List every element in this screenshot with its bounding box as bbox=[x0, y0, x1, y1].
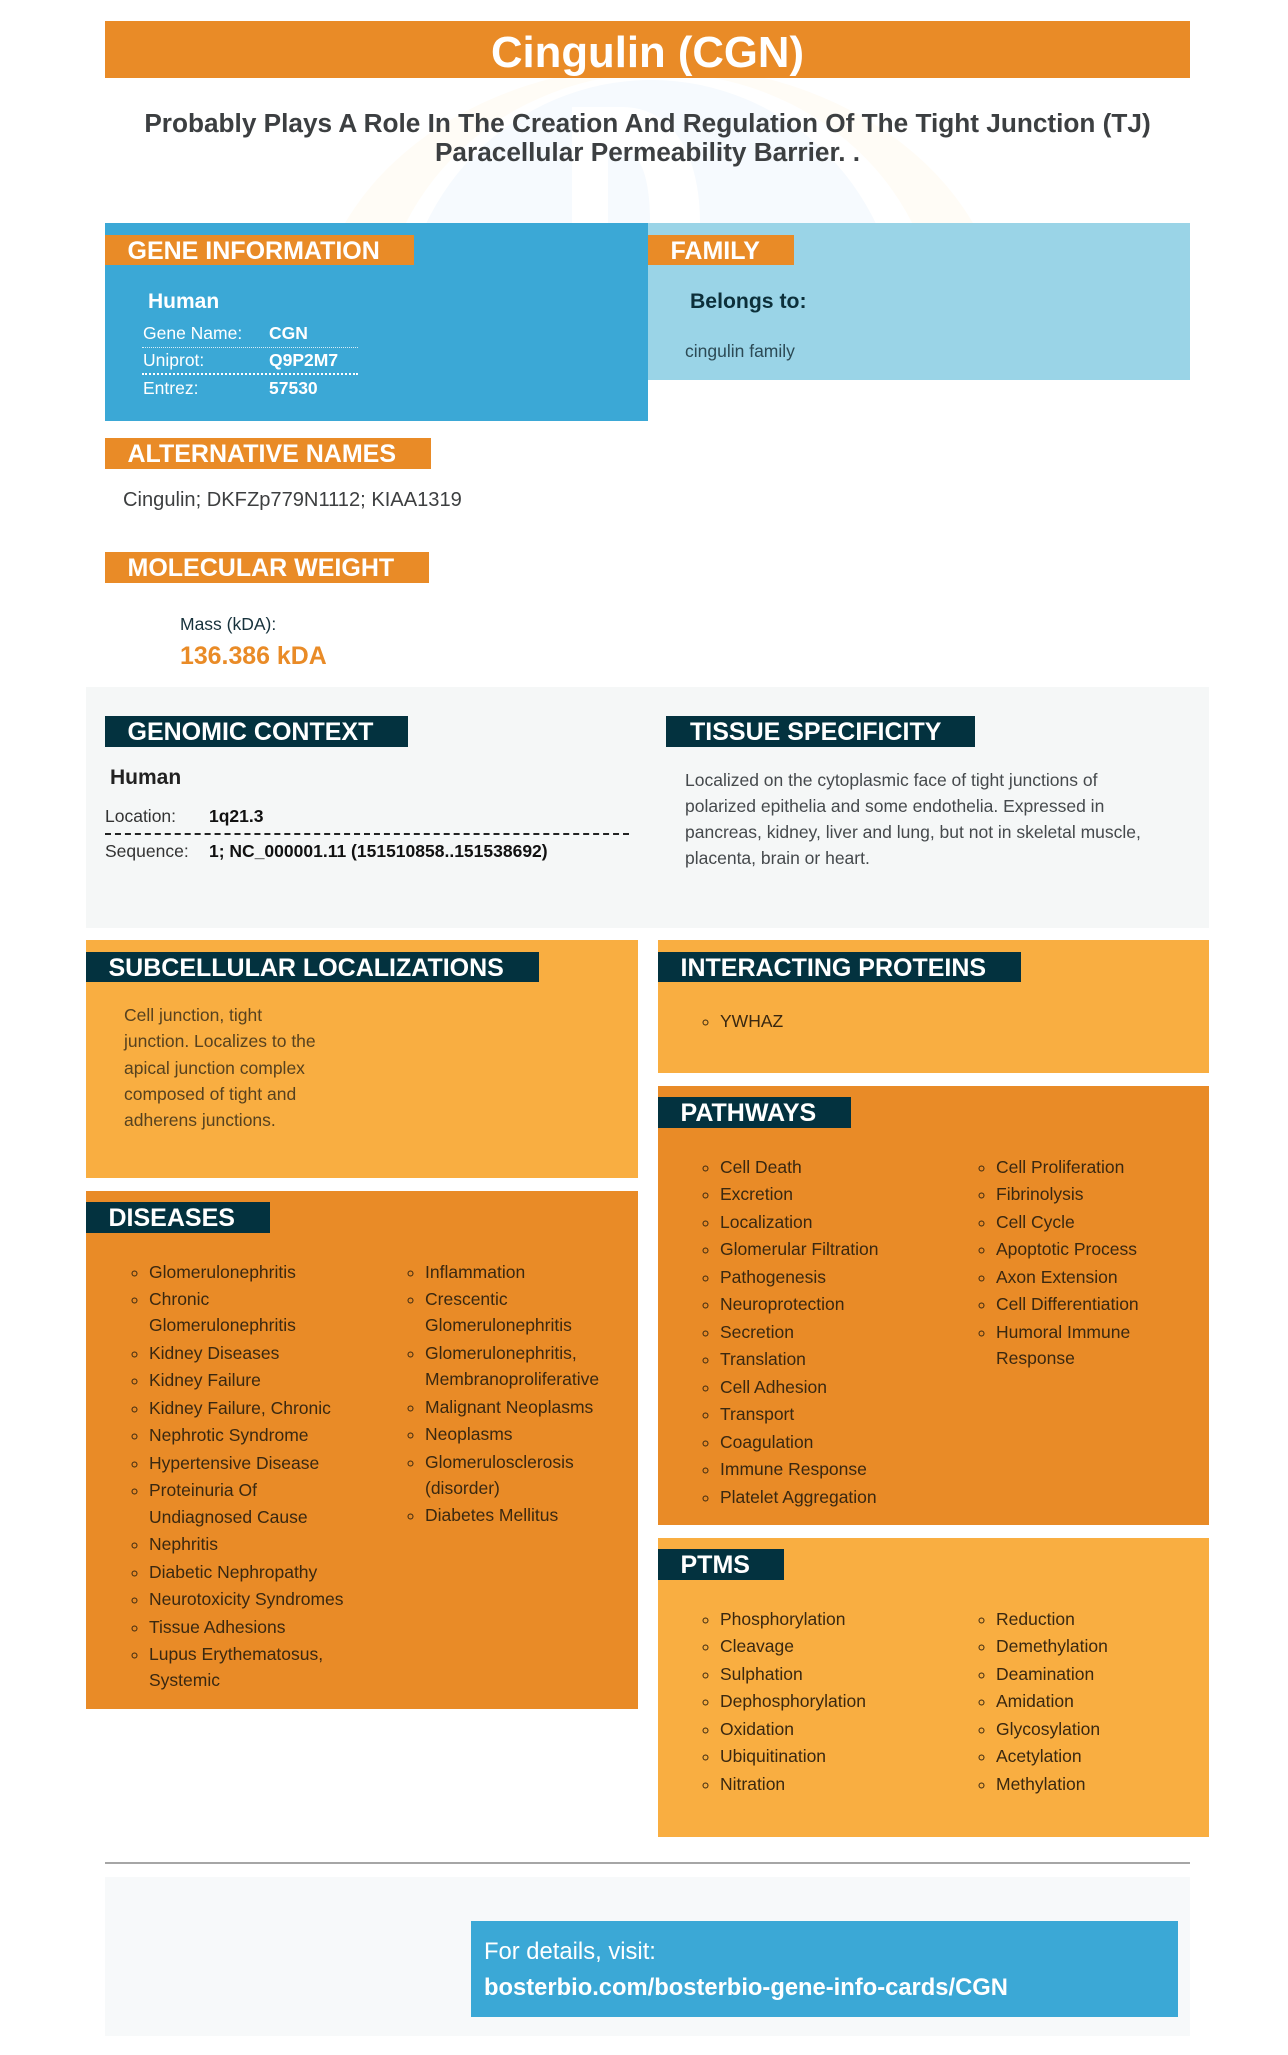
title: Cingulin (CGN) bbox=[491, 28, 804, 77]
uniprot row bbox=[142, 347, 358, 375]
disease list: column 1: Chronic bbox=[149, 1289, 209, 1309]
pathways list: column 2: Cell Cycle bbox=[996, 1212, 1075, 1232]
location row: Location: bbox=[105, 806, 176, 826]
subcellular text: composed of tight and bbox=[124, 1084, 296, 1104]
location row bbox=[105, 803, 629, 835]
disease list: column 1: Glomerulonephritis bbox=[149, 1315, 296, 1335]
ptms list: column 1: Phosphorylation bbox=[720, 1609, 846, 1629]
disease list: column 2: Malignant Neoplasms bbox=[425, 1397, 593, 1417]
pathways list: column 1: Cell Death bbox=[720, 1157, 802, 1177]
disease list: column 2: Glomerulosclerosis bbox=[425, 1452, 574, 1472]
uniprot row: Q9P2M7 bbox=[269, 350, 338, 370]
disease list: column 1: Nephrotic Syndrome bbox=[149, 1425, 309, 1445]
heading: family: FAMILY bbox=[670, 237, 760, 265]
location row: 1q21.3 bbox=[209, 806, 263, 826]
disease list: column 1: Proteinuria Of bbox=[149, 1480, 257, 1500]
pathways list: column 1: Platelet Aggregation bbox=[720, 1487, 877, 1507]
tissue specificity text: placenta, brain or heart. bbox=[685, 848, 870, 868]
entrez row: Entrez: bbox=[143, 378, 198, 398]
heading: diseases bbox=[86, 1202, 270, 1233]
disease list: column 1: Glomerulonephritis bbox=[149, 1262, 296, 1282]
pathways list: column 2: Axon Extension bbox=[996, 1267, 1118, 1287]
disease list: column 1: Kidney Failure bbox=[149, 1370, 261, 1390]
ptms list: column 2: Amidation bbox=[996, 1691, 1074, 1711]
heading: pathways: PATHWAYS bbox=[680, 1099, 816, 1127]
title bbox=[105, 21, 1190, 78]
gene name row: CGN bbox=[269, 323, 308, 343]
disease list: column 1: Kidney Diseases bbox=[149, 1343, 279, 1363]
pathways list: column 1: Pathogenesis bbox=[720, 1267, 826, 1287]
disease list: column 1 bbox=[132, 1262, 344, 1690]
gene name row: Gene Name: bbox=[143, 323, 242, 343]
subtitle bbox=[144, 108, 1151, 167]
heading: ptms: PTMS bbox=[680, 1551, 750, 1579]
heading: diseases: DISEASES bbox=[108, 1204, 235, 1232]
panel: genomic context and tissue specificity bbox=[86, 687, 1209, 928]
pathways list: column 1: Coagulation bbox=[720, 1432, 813, 1452]
pathways list: column 2: Cell Differentiation bbox=[996, 1294, 1139, 1314]
subcellular text: adherens junctions. bbox=[124, 1110, 276, 1130]
disease list: column 1: Systemic bbox=[149, 1670, 220, 1690]
ptms list: column 1: Oxidation bbox=[720, 1719, 794, 1739]
interacting proteins list: YWHAZ bbox=[720, 1011, 783, 1031]
pathways list: column 1: Translation bbox=[720, 1349, 806, 1369]
pathways list: column 1 bbox=[702, 1157, 879, 1507]
pathways list: column 1: Glomerular Filtration bbox=[720, 1239, 879, 1259]
disease list: column 2: Inflammation bbox=[425, 1262, 525, 1282]
disease list: column 2: Neoplasms bbox=[425, 1424, 513, 1444]
panel: footer bbox=[105, 1877, 1190, 2036]
ptms list: column 1: Ubiquitination bbox=[720, 1746, 826, 1766]
details url: bosterbio.com/bosterbio-gene-info-cards/CGN bbox=[484, 1974, 1008, 2001]
panel: family bbox=[648, 223, 1190, 380]
pathways list: column 1: Immune Response bbox=[720, 1459, 867, 1479]
panel: molecular weight bbox=[105, 552, 429, 670]
pathways list: column 1: Excretion bbox=[720, 1184, 793, 1204]
species label: Human bbox=[110, 766, 181, 789]
panel: interacting proteins bbox=[658, 940, 1209, 1073]
pathways list: column 2: Fibrinolysis bbox=[996, 1184, 1084, 1204]
ptms list: column 1 bbox=[702, 1609, 866, 1794]
ptms list: column 2: Glycosylation bbox=[996, 1719, 1100, 1739]
disease list: column 2: Glomerulonephritis bbox=[425, 1315, 572, 1335]
ptms list: column 2: Acetylation bbox=[996, 1746, 1082, 1766]
details label: For details, visit: bbox=[484, 1938, 656, 1965]
alternative names text: Cingulin; DKFZp779N1112; KIAA1319 bbox=[123, 489, 462, 511]
panel: diseases bbox=[86, 1191, 638, 1709]
panel: genomic context and tissue specificity: 1; NC_000001.11 (151510858..151538692) bbox=[209, 841, 548, 861]
disease list: column 1: Lupus Erythematosus, bbox=[149, 1644, 323, 1664]
sequence row: Sequence: bbox=[105, 841, 189, 861]
disease list: column 2: (disorder) bbox=[425, 1478, 500, 1498]
pathways list: column 2 bbox=[978, 1157, 1139, 1368]
pathways list: column 1: Neuroprotection bbox=[720, 1294, 845, 1314]
disease list: column 1: Tissue Adhesions bbox=[149, 1617, 286, 1637]
tissue specificity text: Localized on the cytoplasmic face of tight junctions of bbox=[685, 770, 1097, 790]
gene name row bbox=[142, 320, 358, 348]
disease list: column 1: Undiagnosed Cause bbox=[149, 1507, 308, 1527]
panel: alternative names bbox=[105, 438, 462, 511]
pathways list: column 2: Response bbox=[996, 1348, 1075, 1368]
heading: pathways bbox=[658, 1097, 851, 1128]
background watermark logo bbox=[346, 78, 972, 223]
mass label: Mass (kDA): bbox=[180, 614, 276, 634]
disease list: column 2 bbox=[408, 1262, 599, 1525]
pathways list: column 1: Cell Adhesion bbox=[720, 1377, 827, 1397]
tissue specificity text bbox=[685, 770, 1141, 868]
ptms list: column 2: Demethylation bbox=[996, 1636, 1108, 1656]
pathways list: column 2: Cell Proliferation bbox=[996, 1157, 1124, 1177]
disease list: column 2: Crescentic bbox=[425, 1289, 508, 1309]
pathways list: column 1: Localization bbox=[720, 1212, 812, 1232]
subtitle: Probably Plays A Role In The Creation And Regulation Of The Tight Junction (TJ) bbox=[144, 108, 1151, 138]
mass value: 136.386 kDA bbox=[180, 642, 327, 670]
subcellular text: Cell junction, tight bbox=[124, 1005, 262, 1025]
callout: details link bbox=[471, 1921, 1178, 2017]
disease list: column 1: Kidney Failure, Chronic bbox=[149, 1398, 331, 1418]
tissue specificity text: pancreas, kidney, liver and lung, but not in skeletal muscle, bbox=[685, 822, 1141, 842]
belongs to label: Belongs to: bbox=[690, 290, 807, 313]
ptms list: column 2: Methylation bbox=[996, 1774, 1086, 1794]
panel: subcellular localizations bbox=[86, 940, 638, 1178]
tissue specificity text: polarized epithelia and some endothelia. Expressed in bbox=[685, 796, 1104, 816]
heading: tissue specificity: TISSUE SPECIFICITY bbox=[690, 718, 941, 746]
pathways list: column 2: Apoptotic Process bbox=[996, 1239, 1137, 1259]
ptms list: column 2: Deamination bbox=[996, 1664, 1094, 1684]
sequence row bbox=[105, 841, 548, 861]
ptms list: column 2 bbox=[978, 1609, 1108, 1794]
disease list: column 2: Diabetes Mellitus bbox=[425, 1505, 558, 1525]
entrez row: 57530 bbox=[269, 378, 318, 398]
heading: gene information: GENE INFORMATION bbox=[128, 237, 380, 265]
disease list: column 1: Neurotoxicity Syndromes bbox=[149, 1589, 344, 1609]
uniprot row: Uniprot: bbox=[143, 350, 204, 370]
species label: Human bbox=[148, 290, 219, 313]
heading: molecular weight: MOLECULAR WEIGHT bbox=[128, 554, 394, 582]
subcellular text: apical junction complex bbox=[124, 1058, 305, 1078]
subcellular text: junction. Localizes to the bbox=[124, 1031, 316, 1051]
disease list: column 2: Glomerulonephritis, bbox=[425, 1343, 577, 1363]
ptms list: column 1: Dephosphorylation bbox=[720, 1691, 866, 1711]
heading: family bbox=[648, 235, 794, 265]
disease list: column 1: Nephritis bbox=[149, 1534, 218, 1554]
ptms list: column 1: Cleavage bbox=[720, 1636, 794, 1656]
panel: pathways bbox=[658, 1086, 1209, 1525]
heading: alternative names: ALTERNATIVE NAMES bbox=[128, 440, 396, 468]
ptms list: column 1: Nitration bbox=[720, 1774, 785, 1794]
panel: ptms bbox=[658, 1538, 1209, 1837]
heading: genomic context: GENOMIC CONTEXT bbox=[128, 718, 373, 746]
disease list: column 1: Diabetic Nephropathy bbox=[149, 1562, 317, 1582]
ptms list: column 2: Reduction bbox=[996, 1609, 1075, 1629]
subtitle: Paracellular Permeability Barrier. . bbox=[435, 137, 860, 167]
pathways list: column 1: Secretion bbox=[720, 1322, 794, 1342]
disease list: column 2: Membranoproliferative bbox=[425, 1369, 599, 1389]
entrez row bbox=[143, 378, 318, 398]
family value: cingulin family bbox=[685, 341, 795, 361]
pathways list: column 1: Transport bbox=[720, 1404, 794, 1424]
ptms list: column 1: Sulphation bbox=[720, 1664, 803, 1684]
pathways list: column 2: Humoral Immune bbox=[996, 1322, 1130, 1342]
heading: ptms bbox=[658, 1549, 784, 1580]
heading: subcellular localizations: SUBCELLULAR LOCALIZATIONS bbox=[108, 954, 504, 982]
disease list: column 1: Hypertensive Disease bbox=[149, 1453, 319, 1473]
heading: interacting proteins: INTERACTING PROTEINS bbox=[680, 954, 986, 982]
panel: gene information bbox=[105, 223, 648, 421]
subcellular text bbox=[124, 1005, 316, 1130]
